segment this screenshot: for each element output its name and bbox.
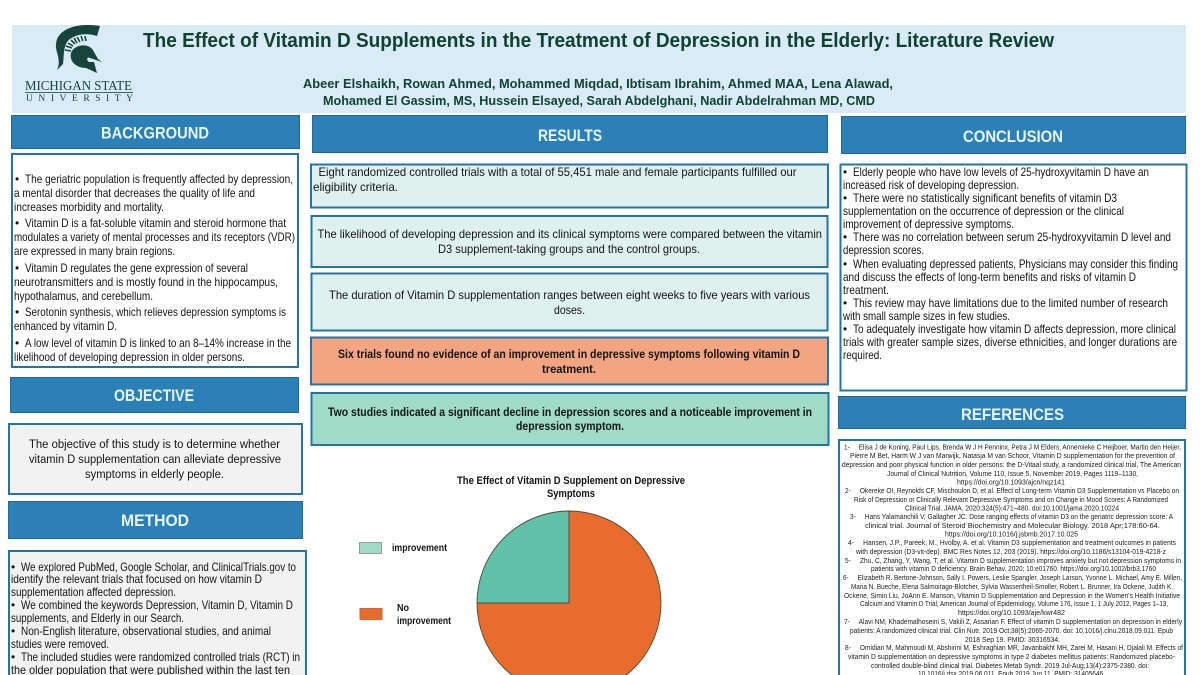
reference list: https://doi.org/10.1093/ajcn/nqz141 <box>957 478 1065 486</box>
logo: Michigan State University <box>25 25 133 104</box>
background text: • <box>15 216 19 230</box>
reference list: https://doi.org/10.1016/j.jsbmb.2017.10.025 <box>945 530 1078 538</box>
heading: method <box>8 502 302 538</box>
conclusion text: There were no statistically significant benefits of vitamin D3 <box>853 191 1117 205</box>
method text: Non-English literature, observational studies, and animal <box>21 624 271 638</box>
method text: studies were removed. <box>11 637 109 651</box>
result box: improvement <box>312 393 828 445</box>
logo: Michigan State University: UNIVERSITY <box>26 94 133 104</box>
authors: Mohamed El Gassim, MS, Hussein Elsayed, Sarah Abdelghani, Nadir Abdelrahman MD, CMD <box>323 93 875 108</box>
result box: eligibility: eligibility criteria. <box>313 180 398 194</box>
background text: neurotransmitters and is mostly found in the hippocampus, <box>14 275 278 289</box>
legend: no improvement: improvement <box>397 616 452 627</box>
background text: Serotonin synthesis, which relieves depression symptoms is <box>25 305 286 319</box>
conclusion text: improvement of depressive symptoms. <box>843 217 1014 231</box>
background text: increases morbidity and mortality. <box>14 200 164 214</box>
heading: objective: OBJECTIVE <box>114 386 194 405</box>
header banner <box>12 25 1186 113</box>
result box: no improvement <box>311 338 828 384</box>
legend: improvement <box>360 542 448 554</box>
result box: duration: The duration of Vitamin D supplementation ranges between eight weeks to five years with various <box>329 288 810 302</box>
conclusion text: • <box>843 296 847 310</box>
result box: eligibility: Eight randomized controlled trials with a total of 55,451 male and female participants fulfilled our <box>318 165 797 179</box>
conclusion text: with small sample sizes in few studies. <box>842 309 1010 323</box>
heading: background <box>12 116 300 148</box>
method text: We explored PubMed, Google Scholar, and ClinicalTrials.gov to <box>21 560 296 574</box>
background text: The geriatric population is frequently affected by depression, <box>25 172 293 186</box>
result box: improvement: Two studies indicated a significant decline in depression scores and a noticeable improvement in <box>328 405 812 419</box>
background text: enhanced by vitamin D. <box>14 319 117 333</box>
background text <box>12 154 298 367</box>
result box: eligibility <box>311 164 828 208</box>
objective text: The objective of this study is to determine whether <box>29 437 280 451</box>
background text: • <box>15 172 19 186</box>
authors <box>303 76 893 108</box>
icon: spartan helmet <box>56 25 102 73</box>
reference list: clinical trial. Journal of Steroid Biochemistry and Molecular Biology. 2018 Apr;178:60-64. <box>865 521 1160 530</box>
method text: • <box>11 624 15 638</box>
method text: • <box>11 650 15 664</box>
result box: comparison <box>312 216 828 267</box>
conclusion text: increased risk of developing depression. <box>843 178 1019 192</box>
conclusion text: • <box>843 322 847 336</box>
method text: supplements, and Elderly in our Search. <box>11 611 184 625</box>
reference list: controlled double-blind clinical trial. Diabetes Metab Syndr. 2019 Jul-Aug;13(4):2375-2380. doi: <box>871 661 1149 670</box>
method text: The included studies were randomized controlled trials (RCT) in <box>21 650 300 664</box>
heading: results: RESULTS <box>538 126 602 145</box>
chart title <box>457 475 685 500</box>
background text: • <box>15 336 19 350</box>
result box: no improvement: Six trials found no evidence of an improvement in depressive symptoms following vitamin D <box>338 347 800 361</box>
pie chart: effect of vitamin D <box>360 475 685 675</box>
reference list: https://doi.org/10.1093/aje/kwr482 <box>958 608 1065 617</box>
conclusion text: Elderly people who have low levels of 25-hydroxyvitamin D have an <box>853 165 1149 179</box>
result box: no improvement: treatment. <box>542 362 596 376</box>
result box: comparison: D3 supplement-taking groups and the control groups. <box>438 242 700 256</box>
conclusion text: required. <box>843 348 882 362</box>
method text: • <box>11 598 15 612</box>
reference list: Journal of Clinical Nutrition, Volume 110, Issue 5, November 2019, Pages 1119–1130, <box>887 469 1138 478</box>
heading: background: BACKGROUND <box>101 124 209 142</box>
legend: no improvement: No <box>397 603 409 614</box>
reference list: 2018 Sep 19. PMID: 30316534. <box>965 635 1060 644</box>
reference list: Clinical Trial. JAMA. 2020;324(5):471–480. doi:10.1001/jama.2020.10224 <box>905 504 1120 512</box>
conclusion text: • <box>843 230 847 244</box>
heading: references <box>838 396 1186 428</box>
chart title: Symptoms <box>547 488 595 500</box>
logo: Michigan State University: MICHIGAN STATE <box>25 78 132 93</box>
panel: method <box>8 502 306 675</box>
method text: • <box>11 560 15 574</box>
legend: no improvement <box>360 603 452 627</box>
result box: improvement: depression symptom. <box>516 419 624 433</box>
heading: method: METHOD <box>121 511 189 530</box>
background text: Vitamin D is a fat-soluble vitamin and steroid hormone that <box>25 216 287 230</box>
pie slices <box>477 511 661 675</box>
conclusion text: supplementation on the occurrence of depression or the clinical <box>843 204 1124 218</box>
heading: conclusion <box>842 116 1186 154</box>
conclusion text: • <box>843 191 847 205</box>
background text: • <box>15 261 19 275</box>
method text <box>9 551 306 675</box>
panel: references <box>838 396 1186 675</box>
panel: background <box>12 116 300 367</box>
objective text: vitamin D supplementation can alleviate depressive <box>29 452 281 466</box>
background text: are expressed in many brain regions. <box>14 244 175 258</box>
heading: references: REFERENCES <box>961 405 1064 424</box>
title: The Effect of Vitamin D Supplements in the Treatment of Depression in the Elderly: Literature Review <box>143 30 1054 52</box>
panel: results <box>311 116 828 445</box>
reference list <box>839 440 1185 675</box>
objective text <box>9 424 302 494</box>
heading: conclusion: CONCLUSION <box>963 127 1063 146</box>
method text: identify the relevant trials that focused on how vitamin D <box>11 572 262 586</box>
background text: modulates a variety of mental processes and its receptors (VDR) <box>14 230 295 244</box>
conclusion text <box>840 164 1186 390</box>
authors: Abeer Elshaikh, Rowan Ahmed, Mohammed Miqdad, Ibtisam Ibrahim, Ahmed MAA, Lena Alawad, <box>303 76 893 91</box>
conclusion text: treatment. <box>843 283 889 297</box>
chart title: The Effect of Vitamin D Supplement on Depressive <box>457 475 685 487</box>
panel: conclusion <box>840 116 1186 390</box>
background text: a mental disorder that decreases the quality of life and <box>14 186 255 200</box>
result box: comparison: The likelihood of developing depression and its clinical symptoms were compared between the vitamin <box>318 227 822 241</box>
background text: Vitamin D regulates the gene expression of several <box>25 261 248 275</box>
result box: duration: doses. <box>554 303 585 317</box>
result box: duration <box>312 274 828 330</box>
background text: • <box>15 305 19 319</box>
panel: objective <box>9 378 302 494</box>
conclusion text: depression scores. <box>843 243 924 257</box>
background text: hypothalamus, and cerebellum. <box>14 289 153 303</box>
heading: results <box>312 116 828 152</box>
method text: supplementation affected depression. <box>11 585 176 599</box>
conclusion text: • <box>843 165 847 179</box>
method text: We combined the keywords Depression, Vitamin D, Vitamin D <box>21 598 293 612</box>
heading: objective <box>10 378 298 412</box>
legend: improvement: improvement <box>392 543 448 554</box>
conclusion text: and discuss the effects of long-term benefits and risks of vitamin D <box>843 270 1136 284</box>
conclusion text: • <box>843 257 847 271</box>
objective text: symptoms in elderly people. <box>85 467 224 481</box>
background text: likelihood of developing depression in older persons. <box>14 350 245 364</box>
background text: A low level of vitamin D is linked to an 8–14% increase in the <box>25 336 291 350</box>
reference list: patients with vitamin D deficiency. Brain Behav. 2020; 10:e01760. https://doi.org/10.1002/brb3.1760 <box>871 564 1156 573</box>
